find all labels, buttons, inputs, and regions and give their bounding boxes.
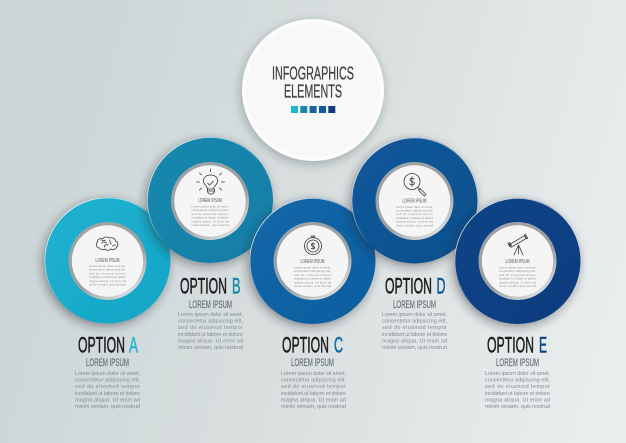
ring: option B — [147, 137, 273, 263]
text block: option C: Lorem ipsum dolor sit amet, — [281, 371, 346, 377]
text block: option B: Lorem ipsum dolor sit amet, — [178, 312, 243, 318]
text: circle A: minim veniam, quis nostrud — [89, 282, 126, 286]
ring: option D — [352, 138, 478, 264]
text: circle A: magna aliqua. Ut enim ad — [89, 279, 126, 283]
ring: option C — [250, 198, 376, 324]
text block: option B — [178, 312, 243, 351]
text: circle B: minim veniam, quis nostrud — [192, 223, 229, 227]
panel: option A — [44, 198, 170, 410]
text block: option B: incididunt ut labore et dolore — [178, 332, 243, 338]
heading: option C: OPTION — [282, 333, 329, 358]
text: circle C — [294, 266, 332, 288]
heading: option B: OPTION — [180, 274, 227, 298]
label: circle E: LOREM IPSUM — [506, 259, 530, 265]
text: circle C: magna aliqua. Ut enim ad — [294, 280, 332, 284]
text: circle B — [192, 204, 229, 227]
icon: brain — [96, 237, 118, 250]
heading: option C: C — [334, 333, 343, 358]
title — [272, 62, 354, 101]
text block: option E: incididunt ut labore et dolore — [485, 391, 550, 397]
icon: telescope — [508, 234, 528, 255]
text: circle D: Lorem ipsum dolor sit amet, — [396, 205, 433, 209]
colour key squares — [291, 106, 335, 113]
text block: option A: sed do eiusmod tempor — [75, 384, 140, 390]
text: circle B: sed do eiusmod tempor — [192, 212, 229, 216]
ring: option A — [44, 198, 170, 324]
heading: option E: OPTION — [487, 333, 534, 358]
label: circle B: LOREM IPSUM — [198, 198, 222, 204]
text: circle D: magna aliqua. Ut enim ad — [396, 220, 434, 224]
icon: magnifier with dollar — [404, 174, 426, 196]
text: circle C: Lorem ipsum dolor sit amet, — [294, 266, 331, 270]
text block: option C — [281, 371, 346, 410]
text block: option A — [75, 371, 140, 410]
subheading: option D: LOREM IPSUM — [393, 299, 436, 311]
text: circle C: sed do eiusmod tempor — [294, 273, 331, 277]
subheading: option A: LOREM IPSUM — [86, 357, 129, 369]
text block: option A: consectetur adipiscing elit, — [75, 378, 140, 384]
text: circle D: consectetur adipiscing elit, — [396, 208, 433, 212]
text block: option A: magna aliqua. Ut enim ad — [75, 397, 140, 403]
text: circle E: magna aliqua. Ut enim ad — [499, 280, 536, 284]
panel: title circle — [242, 19, 384, 161]
icon: light bulb — [196, 169, 224, 194]
text: circle D: sed do eiusmod tempor — [396, 212, 433, 216]
text: circle E — [499, 266, 536, 288]
text: circle A: incididunt ut labore et dolore — [89, 275, 126, 279]
text: circle D: minim veniam, quis nostrud — [396, 223, 434, 227]
text: circle E: sed do eiusmod tempor — [499, 273, 536, 277]
text block: option E — [485, 371, 550, 410]
text: circle D — [396, 205, 434, 227]
text block: option D: consectetur adipiscing elit, — [382, 319, 447, 325]
text block: option E: consectetur adipiscing elit, — [485, 378, 550, 384]
text block: option B: magna aliqua. Ut enim ad — [178, 338, 243, 344]
subheading: option B: LOREM IPSUM — [189, 299, 232, 311]
text block: option C: magna aliqua. Ut enim ad — [281, 397, 346, 403]
title: ELEMENTS — [284, 80, 342, 101]
text block: option B: sed do eiusmod tempor — [178, 325, 243, 331]
panel: option D — [352, 138, 478, 351]
text: circle E: consectetur adipiscing elit, — [499, 269, 536, 273]
text: circle D: incididunt ut labore et dolore — [396, 216, 434, 220]
text: circle C: incididunt ut labore et dolore — [294, 277, 332, 281]
panel: option B — [147, 137, 273, 351]
text block: option E: minim veniam, quis nostrud — [485, 404, 550, 410]
heading: option A: A — [129, 333, 138, 358]
text: circle B: incididunt ut labore et dolore — [192, 216, 229, 220]
text: circle C: consectetur adipiscing elit, — [294, 269, 331, 273]
panel: option E — [454, 198, 580, 410]
text: circle C: minim veniam, quis nostrud — [294, 284, 332, 288]
text block: option D: Lorem ipsum dolor sit amet, — [382, 312, 447, 318]
subheading: option E: LOREM IPSUM — [496, 357, 539, 369]
ring: option E — [454, 198, 580, 324]
text block: option D: incididunt ut labore et dolore — [382, 332, 447, 338]
text: circle A: consectetur adipiscing elit, — [89, 268, 126, 272]
text: circle E: incididunt ut labore et dolore — [499, 277, 536, 281]
text block: option E: Lorem ipsum dolor sit amet, — [485, 371, 550, 377]
text: circle B: consectetur adipiscing elit, — [192, 208, 229, 212]
label: circle C: LOREM IPSUM — [300, 259, 324, 265]
panel: option C — [250, 198, 376, 410]
subheading: option C: LOREM IPSUM — [291, 357, 334, 369]
text: circle A — [89, 264, 126, 286]
text block: option C: incididunt ut labore et dolore — [281, 391, 346, 397]
text block: option C: sed do eiusmod tempor — [281, 384, 346, 390]
text block: option A: Lorem ipsum dolor sit amet, — [75, 371, 140, 377]
text: circle A: sed do eiusmod tempor — [89, 271, 126, 275]
text block: option A: incididunt ut labore et dolore — [75, 391, 140, 397]
text block: option D: minim veniam, quis nostrud — [382, 345, 447, 351]
heading: option D: OPTION — [385, 274, 432, 298]
disc: title circle — [242, 19, 384, 161]
text: circle E: Lorem ipsum dolor sit amet, — [499, 266, 536, 270]
text: circle E: minim veniam, quis nostrud — [499, 284, 536, 288]
heading: option B: B — [232, 274, 240, 298]
label: circle D: LOREM IPSUM — [402, 198, 426, 204]
text block: option D — [382, 312, 447, 351]
text block: option B: minim veniam, quis nostrud — [178, 345, 243, 351]
heading: option D: D — [436, 274, 446, 298]
text block: option B: consectetur adipiscing elit, — [178, 319, 243, 325]
heading: option A: OPTION — [78, 333, 125, 358]
label: circle A: LOREM IPSUM — [96, 258, 120, 264]
text: circle A: Lorem ipsum dolor sit amet, — [89, 264, 126, 268]
icon: stopwatch — [304, 236, 322, 254]
title: INFOGRAPHICS — [272, 62, 354, 83]
heading: option E: E — [539, 333, 547, 358]
text: circle B: magna aliqua. Ut enim ad — [192, 219, 229, 223]
text block: option D: sed do eiusmod tempor — [382, 325, 447, 331]
text block: option E: sed do eiusmod tempor — [485, 384, 550, 390]
text block: option C: consectetur adipiscing elit, — [281, 378, 346, 384]
text: circle B: Lorem ipsum dolor sit amet, — [192, 204, 229, 208]
text block: option C: minim veniam, quis nostrud — [281, 404, 346, 410]
text block: option A: minim veniam, quis nostrud — [75, 404, 140, 410]
text block: option E: magna aliqua. Ut enim ad — [485, 397, 550, 403]
text block: option D: magna aliqua. Ut enim ad — [382, 338, 447, 344]
